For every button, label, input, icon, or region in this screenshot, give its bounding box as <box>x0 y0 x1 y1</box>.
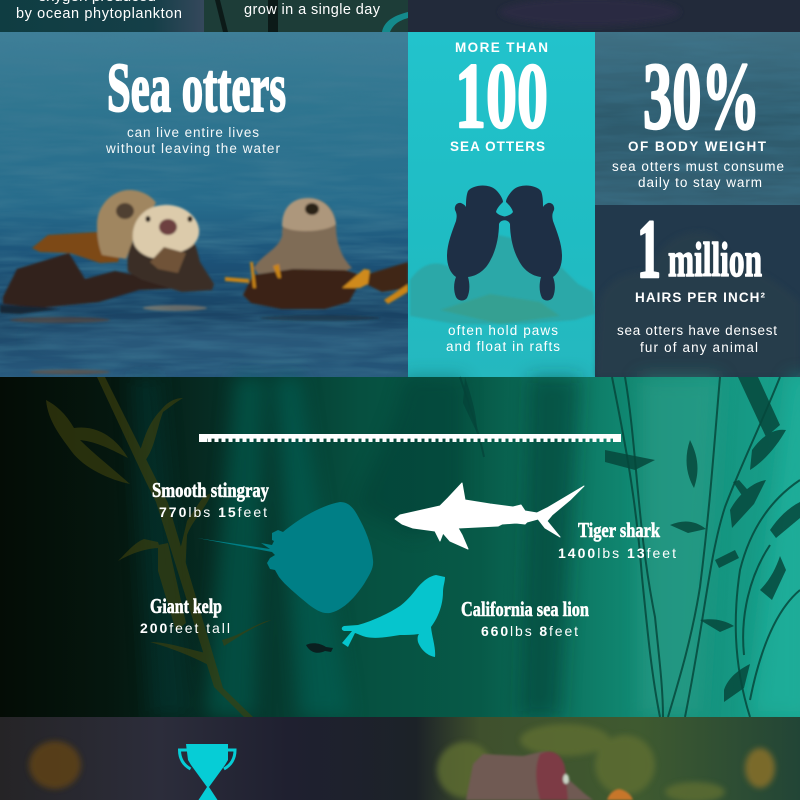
kelp strands right <box>460 377 800 717</box>
left brown mass <box>3 253 213 308</box>
text: can live entire lives: can live entire lives <box>127 125 259 140</box>
text: of body weight: OF BODY WEIGHT <box>628 139 767 154</box>
text: and float in rafts: and float in rafts <box>446 339 560 354</box>
text: sea otters: SEA OTTERS <box>450 139 545 154</box>
label: california sea lion <box>461 597 589 639</box>
text: hairs per inch: HAIRS PER INCH² <box>635 290 766 305</box>
right otter <box>254 198 352 274</box>
photo overlay: otters in teal <box>410 234 595 324</box>
photo: green algae right <box>437 724 725 800</box>
label: tiger shark: Tiger shark <box>578 518 660 542</box>
number: 1: 1 <box>637 203 661 296</box>
ruler scale <box>199 434 621 442</box>
label: tiger shark <box>558 518 676 561</box>
label: smooth stingray <box>152 478 269 520</box>
heading: sea otters: Sea otters <box>107 50 286 127</box>
photo: cuttlefish <box>466 752 633 800</box>
label: california sea lion: 660lbs 8feet <box>481 623 578 639</box>
label: california sea lion: California sea lion <box>461 597 589 621</box>
back otter <box>97 190 156 259</box>
number: 100: 100 <box>455 45 548 148</box>
text: phytoplankton fact: by ocean phytoplankton <box>16 6 182 22</box>
text: densest fur: sea otters have densest <box>617 323 777 338</box>
panel: 30% of body weight <box>595 32 800 205</box>
label: giant kelp: Giant kelp <box>150 594 222 618</box>
icon: stingray <box>197 502 373 613</box>
text: of any animal: fur of any animal <box>640 340 758 355</box>
water reflections <box>143 305 207 311</box>
front otter body <box>128 234 214 292</box>
label: giant kelp <box>140 594 230 636</box>
panel: sea otters photo <box>0 32 430 377</box>
icon: trophy <box>180 744 235 800</box>
label: tiger shark: 1400lbs 13feet <box>558 545 676 561</box>
icon: otters holding paws <box>447 186 562 301</box>
panel: kelp forest size comparison <box>0 377 800 717</box>
kelp leaf <box>32 232 126 263</box>
panel: more than 100 sea otters <box>408 32 595 377</box>
icon: california sea lion <box>342 575 445 657</box>
photo: otter group <box>0 190 408 374</box>
label: giant kelp: 200feet tall <box>140 620 230 636</box>
text: often hold paws: often hold paws <box>448 323 558 338</box>
label: smooth stingray: 770lbs 15feet <box>159 504 267 520</box>
icon: tiger shark <box>395 483 584 549</box>
label: smooth stingray: Smooth stingray <box>152 478 269 502</box>
panel: cuttlefish section <box>0 717 800 800</box>
text: without leaving the water: without leaving the water <box>105 141 280 156</box>
photo: small fish <box>306 643 333 653</box>
kelp strand left <box>46 377 272 717</box>
text: sea otters must consume: sea otters must consume <box>612 159 784 174</box>
top strip: cropped facts <box>0 0 800 32</box>
right brown mass <box>243 269 363 309</box>
photo: yellow algae left <box>29 741 81 789</box>
front otter head <box>133 205 199 258</box>
text: daily to stay warm: daily to stay warm <box>638 175 762 190</box>
text: more than: MORE THAN <box>455 40 548 55</box>
panel: 1 million hairs per inch <box>595 203 800 377</box>
light rays <box>130 377 800 717</box>
text: kelp growth fact: grow in a single day <box>244 2 381 18</box>
